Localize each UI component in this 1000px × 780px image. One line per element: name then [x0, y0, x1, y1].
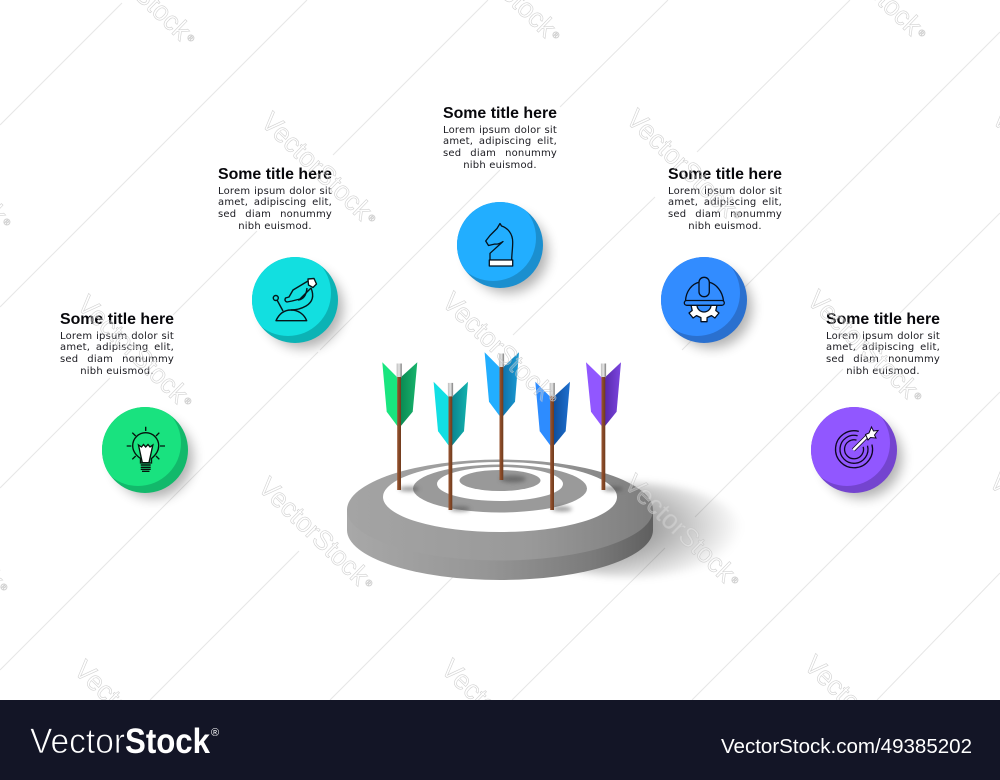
footer logo [30, 722, 219, 761]
outer white ring [383, 462, 617, 532]
watermark overlay: ® [909, 755, 921, 767]
watermark overlay: ® [546, 759, 558, 771]
footer logo: ® [211, 727, 219, 739]
watermark overlay: ® [550, 29, 562, 41]
body text [826, 330, 940, 377]
heading: Some title here [826, 311, 940, 328]
watermark overlay: ® [547, 392, 559, 404]
body text: Lorem ipsum dolor sit [826, 330, 940, 342]
board top surface [347, 460, 653, 560]
watermark overlay: VectorStock [436, 286, 559, 406]
middle grey ring [413, 464, 587, 512]
arrow: green [382, 362, 417, 490]
body text: Lorem ipsum dolor sit [60, 330, 174, 342]
arrow: purple [586, 362, 621, 490]
badge: purple target [804, 400, 902, 498]
watermark overlay: ® [731, 209, 743, 221]
body text: nibh euismod. [688, 221, 762, 232]
watermark overlay: ® [1, 216, 13, 228]
body text: sed diam nonummy [443, 148, 557, 159]
icon: microscope [273, 278, 316, 321]
arrow: cyan [434, 382, 468, 510]
board side [347, 510, 653, 580]
icon: helmet and gear [684, 277, 724, 322]
board cast shadow [522, 483, 742, 577]
body text: sed diam nonummy [60, 354, 174, 365]
body text: amet, adipiscing elit, [443, 136, 557, 147]
watermark overlay: ® [366, 212, 378, 224]
footer logo: Vector [30, 722, 125, 761]
badge: sky blue chess knight [450, 195, 548, 293]
body text: sed diam nonummy [218, 209, 332, 220]
body text: Lorem ipsum dolor sit [443, 124, 557, 136]
inner white ring [437, 467, 563, 501]
watermark overlay: VectorStock [71, 289, 194, 409]
body text: amet, adipiscing elit, [60, 342, 174, 353]
body text [218, 186, 332, 232]
heading: Some title here [218, 166, 332, 183]
watermark overlay: ® [729, 574, 741, 586]
arrow: sky blue [485, 352, 519, 480]
watermark overlay: VectorStock [618, 468, 741, 588]
body text: sed diam nonummy [668, 209, 782, 220]
body text: nibh euismod. [238, 221, 312, 232]
body text: amet, adipiscing elit, [826, 342, 940, 353]
text block: sky blue [443, 105, 557, 171]
icon: chess knight [486, 224, 513, 266]
body text: sed diam nonummy [826, 354, 940, 365]
badge: cyan microscope [245, 250, 343, 348]
watermark overlay: VectorStock [798, 649, 921, 769]
body text: nibh euismod. [846, 366, 920, 377]
badge: green lightbulb [95, 400, 193, 498]
body text: nibh euismod. [463, 160, 537, 171]
body text [668, 186, 782, 232]
watermark overlay: VectorStock [801, 284, 924, 404]
watermark overlay: VectorStock [68, 654, 191, 774]
text block: cyan [218, 166, 332, 232]
body text: nibh euismod. [80, 366, 154, 377]
body text: amet, adipiscing elit, [218, 197, 332, 208]
arrow: blue [535, 382, 570, 510]
watermark overlay: VectorStock [252, 471, 375, 591]
bullseye [460, 470, 540, 491]
watermark overlay: VectorStock [435, 653, 558, 773]
text block: blue [668, 166, 782, 232]
heading: Some title here [443, 105, 557, 122]
icon: lightbulb [127, 427, 165, 471]
body text: amet, adipiscing elit, [668, 197, 782, 208]
icon: target with dart [836, 427, 878, 468]
heading: Some title here [60, 311, 174, 328]
heading: Some title here [668, 166, 782, 183]
watermark overlay: VectorStock [255, 106, 378, 226]
target board [347, 460, 742, 580]
body text: Lorem ipsum dolor sit [218, 186, 332, 196]
footer image id: VectorStock.com/49385202 [721, 736, 972, 758]
watermark overlay: ® [363, 577, 375, 589]
text block: purple [826, 311, 940, 377]
watermark overlay: ® [916, 27, 928, 39]
watermark overlay: ® [185, 32, 197, 44]
body text [60, 330, 174, 377]
body text: Lorem ipsum dolor sit [668, 186, 782, 196]
watermark overlay: ® [912, 390, 924, 402]
body text [443, 124, 557, 171]
text block: left green [60, 311, 174, 377]
watermark overlay: VectorStock [620, 103, 743, 223]
footer logo: Stock [125, 722, 210, 761]
watermark overlay: ® [179, 760, 191, 772]
badge: blue helmet and gear [654, 250, 752, 348]
target board with arrows [102, 202, 908, 580]
arrow base shadows [399, 476, 623, 512]
watermark overlay: ® [182, 395, 194, 407]
